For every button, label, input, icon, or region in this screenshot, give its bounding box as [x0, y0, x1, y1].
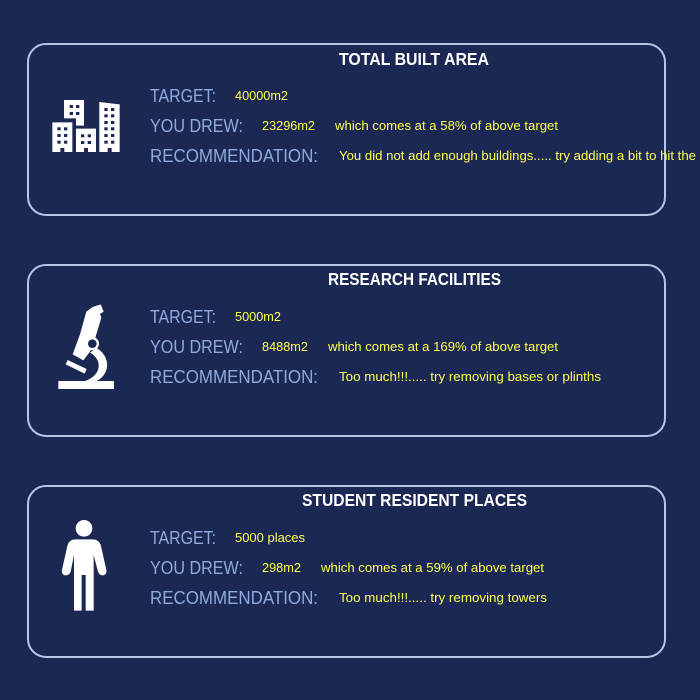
panel: research facilities — [28, 265, 665, 436]
heading: total built area: TOTAL BUILT AREA — [339, 49, 489, 69]
value: recommendation: You did not add enough buildings..... try adding a bit to hit the — [339, 148, 696, 163]
value: recommendation: Too much!!!..... try removing towers — [339, 590, 547, 605]
value: you drew: 8488m2 — [262, 339, 308, 354]
label: you drew: YOU DREW: — [150, 116, 243, 136]
heading: student resident places: STUDENT RESIDENT PLACES — [302, 490, 527, 510]
label: target: TARGET: — [150, 528, 216, 548]
label: target: TARGET: — [150, 86, 216, 106]
label: you drew: YOU DREW: — [150, 558, 243, 578]
comparison to target: which comes at a 59% of above target — [320, 560, 544, 575]
icon: person — [62, 520, 106, 611]
label: target: TARGET: — [150, 307, 216, 327]
value: recommendation: Too much!!!..... try removing bases or plinths — [339, 369, 601, 384]
label: recommendation: RECOMMENDATION: — [150, 367, 318, 387]
value: you drew: 298m2 — [262, 560, 301, 575]
panel: total built area — [28, 44, 696, 215]
value: target: 40000m2 — [235, 88, 288, 103]
label: recommendation: RECOMMENDATION: — [150, 146, 318, 166]
panel: student resident places — [28, 486, 665, 657]
label: you drew: YOU DREW: — [150, 337, 243, 357]
comparison to target: which comes at a 58% of above target — [334, 118, 558, 133]
value: you drew: 23296m2 — [262, 118, 315, 133]
icon: microscope — [58, 304, 114, 389]
value: target: 5000 places — [235, 530, 305, 545]
label: recommendation: RECOMMENDATION: — [150, 588, 318, 608]
icon: buildings — [52, 100, 120, 152]
heading: research facilities: RESEARCH FACILITIES — [328, 269, 501, 289]
comparison to target: which comes at a 169% of above target — [327, 339, 558, 354]
value: target: 5000m2 — [235, 309, 281, 324]
